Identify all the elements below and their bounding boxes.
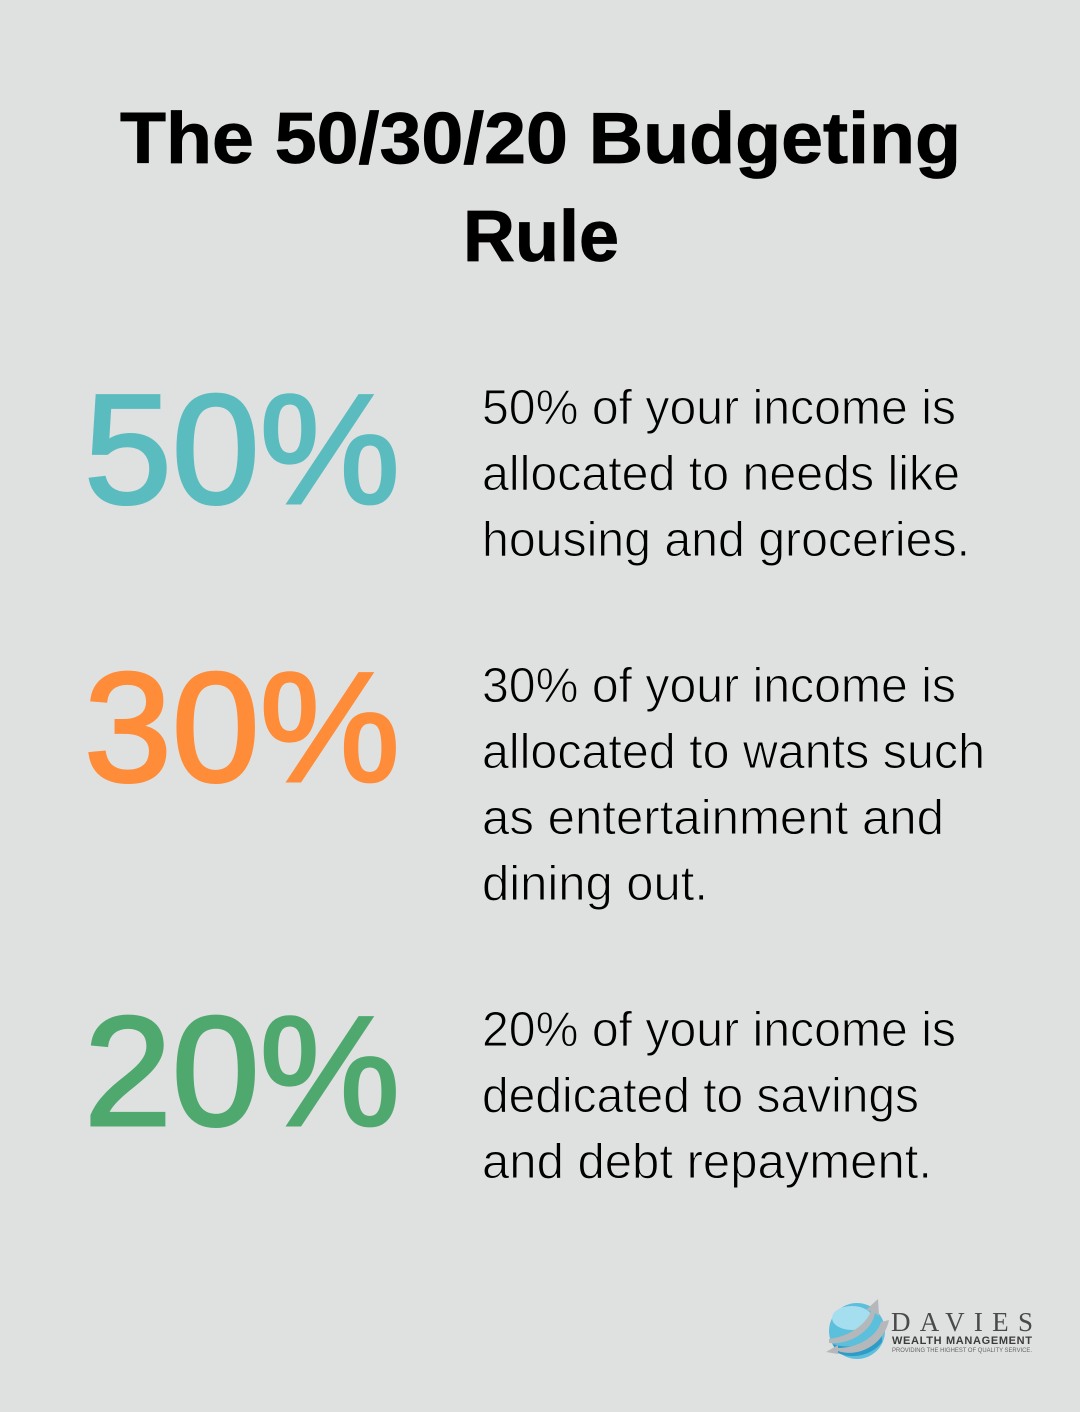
text block: wants: 30% of your income is (482, 659, 956, 713)
text block: savings: dedicated to savings (482, 1069, 919, 1123)
panel: 20% savings (84, 985, 956, 1189)
text block: needs: allocated to needs like (482, 447, 960, 501)
panel: 30% wants (84, 641, 985, 911)
wordmark (891, 1307, 1033, 1354)
wordmark: PROVIDING THE HIGHEST OF QUALITY SERVICE. (892, 1347, 1032, 1354)
stat: 30%: 30% (84, 641, 400, 815)
text block: needs: housing and groceries. (482, 513, 970, 567)
text block: needs: 50% of your income is (482, 381, 956, 435)
text block: wants (482, 659, 985, 911)
icon: globe with arrows (826, 1299, 889, 1359)
wordmark: WEALTH MANAGEMENT (892, 1335, 1032, 1347)
panel: 50% needs (84, 363, 970, 567)
text block: wants: dining out. (482, 857, 708, 911)
text block: wants: as entertainment and (482, 791, 944, 845)
text block: wants: allocated to wants such (482, 725, 985, 779)
logo: Davies Wealth Management (826, 1299, 1033, 1359)
text block: savings: 20% of your income is (482, 1003, 956, 1057)
stat: 20%: 20% (84, 985, 400, 1159)
text block: needs (482, 381, 970, 567)
wordmark: DAVIES (891, 1307, 1033, 1337)
title: The 50/30/20 Budgeting (120, 99, 961, 179)
title: Rule (463, 197, 619, 277)
title (120, 99, 961, 277)
text block: savings (482, 1003, 956, 1189)
stat: 50%: 50% (84, 363, 400, 537)
text block: savings: and debt repayment. (482, 1135, 932, 1189)
